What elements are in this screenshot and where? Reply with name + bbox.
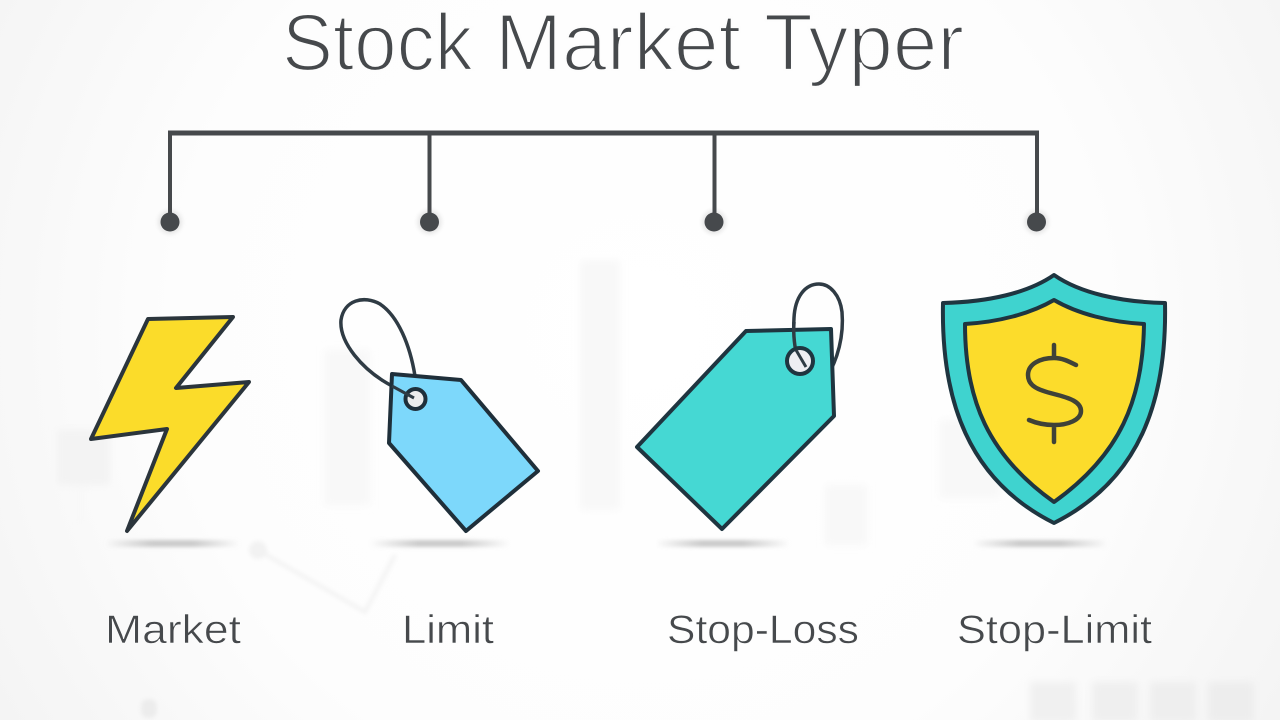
title: Stock [282,0,473,88]
icon: blue price tag [341,300,538,547]
icon: shield with dollar [943,275,1165,547]
label: Stop-Limit: Stop-Limit [957,608,1152,652]
title: Market [495,0,741,88]
label: Stop-Loss: Stop-Loss [667,608,859,652]
label: Limit: Limit [402,608,494,652]
title [282,0,964,88]
icon: teal price tag [637,284,842,547]
icon: lightning bolt [91,317,249,547]
label: Market: Market [105,608,241,652]
title: Typer [764,0,964,88]
connector tree [158,133,1048,234]
